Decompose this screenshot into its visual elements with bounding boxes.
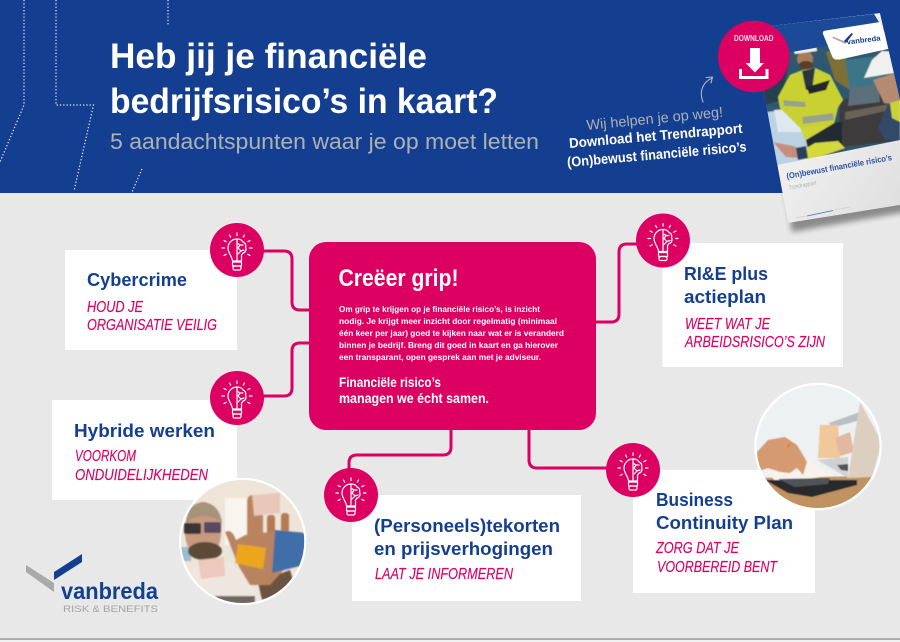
panel heading: Creëer grip!: [338, 265, 458, 292]
logo: vanbreda: RISK & BENEFITS: [63, 604, 158, 615]
card: Business Continuity Plan: ZORG DAT JE: [655, 540, 740, 557]
panel body text: één keer per jaar) goed te kijken naar wat er is veranderd: [339, 328, 564, 338]
icon: lightbulb Cybercrime: [210, 223, 264, 277]
panel body text: binnen je bedrijf. Breng dit goed in kaart en ga hierover: [339, 340, 559, 350]
icon: lightbulb RI&E: [636, 214, 690, 268]
card: Business Continuity Plan: VOORBEREID BENT: [657, 559, 778, 576]
title: [110, 37, 498, 121]
panel body text: [339, 304, 564, 362]
download invitation text: [566, 105, 747, 170]
card: Business Continuity Plan: Continuity Plan: [656, 512, 793, 533]
card: Personeelstekorten: [352, 495, 581, 601]
panel closing statement: [339, 375, 489, 406]
panel body text: Om grip te krijgen op je financiële risico’s, is inzicht: [339, 304, 540, 314]
report cover: Trendrapport: [788, 181, 817, 191]
report cover: [750, 13, 900, 232]
card: Cybercrime: HOUD JE: [87, 299, 144, 316]
card: RI&E plus actieplan: [662, 243, 843, 367]
card: Business Continuity Plan: [633, 470, 815, 593]
icon: lightbulb Business Continuity Plan: [606, 443, 660, 497]
icon: download arrow: [739, 48, 768, 79]
card: Hybride werken: Hybride werken: [74, 420, 215, 441]
report cover: vanbreda: [846, 33, 882, 46]
card: Business Continuity Plan: Business: [656, 489, 733, 510]
subtitle: 5 aandachtspunten waar je op moet letten: [110, 129, 539, 154]
card: Cybercrime: [65, 250, 237, 350]
photo: man with sticky notes: [179, 477, 307, 606]
card: Cybercrime: ORGANISATIE VEILIG: [87, 317, 217, 334]
card: Cybercrime: Cybercrime: [87, 269, 187, 290]
arrow to download: [701, 77, 712, 102]
card: Hybride werken: VOORKOM: [75, 448, 136, 465]
download invitation text: Wij helpen je op weg!: [586, 105, 724, 134]
icon: lightbulb Personeelstekorten: [324, 468, 378, 522]
card: RI&E plus actieplan: ARBEIDSRISICO’S ZIJN: [684, 334, 826, 351]
title: bedrijfsrisico’s in kaart?: [110, 82, 498, 121]
download badge: [718, 21, 789, 92]
card: Personeelstekorten: en prijsverhogingen: [374, 538, 553, 559]
download invitation text: Download het Trendrapport: [568, 120, 743, 151]
title: Heb jij je financiële: [110, 37, 427, 76]
card: RI&E plus actieplan: RI&E plus: [684, 263, 768, 284]
download invitation text: (On)bewust financiële risico’s: [566, 138, 747, 170]
header band: [0, 0, 900, 193]
panel body text: nodig. Je krijgt meer inzicht door regelmatig (minimaal: [339, 316, 557, 326]
logo: vanbreda: [26, 554, 158, 615]
logo: vanbreda: vanbreda: [61, 578, 158, 604]
card: RI&E plus actieplan: WEET WAT JE: [685, 316, 771, 333]
card: RI&E plus actieplan: actieplan: [684, 286, 766, 307]
download badge: DOWNLOAD: [734, 34, 774, 43]
card: Personeelstekorten: LAAT JE INFORMEREN: [375, 566, 514, 583]
photo: hands on calculator and laptop: [754, 382, 884, 512]
card: Hybride werken: ONDUIDELIJKHEDEN: [75, 467, 209, 484]
icon: lightbulb Hybride werken: [210, 371, 264, 425]
panel closing statement: Financiële risico’s: [339, 375, 441, 390]
panel closing statement: managen we écht samen.: [339, 391, 489, 406]
card: Hybride werken: [52, 400, 237, 500]
card: Personeelstekorten: (Personeels)tekorten: [374, 515, 560, 536]
panel body text: een transparant, open gesprek aan met je adviseur.: [339, 352, 541, 362]
connectors: [262, 244, 640, 472]
panel: Creëer grip: [309, 242, 596, 430]
